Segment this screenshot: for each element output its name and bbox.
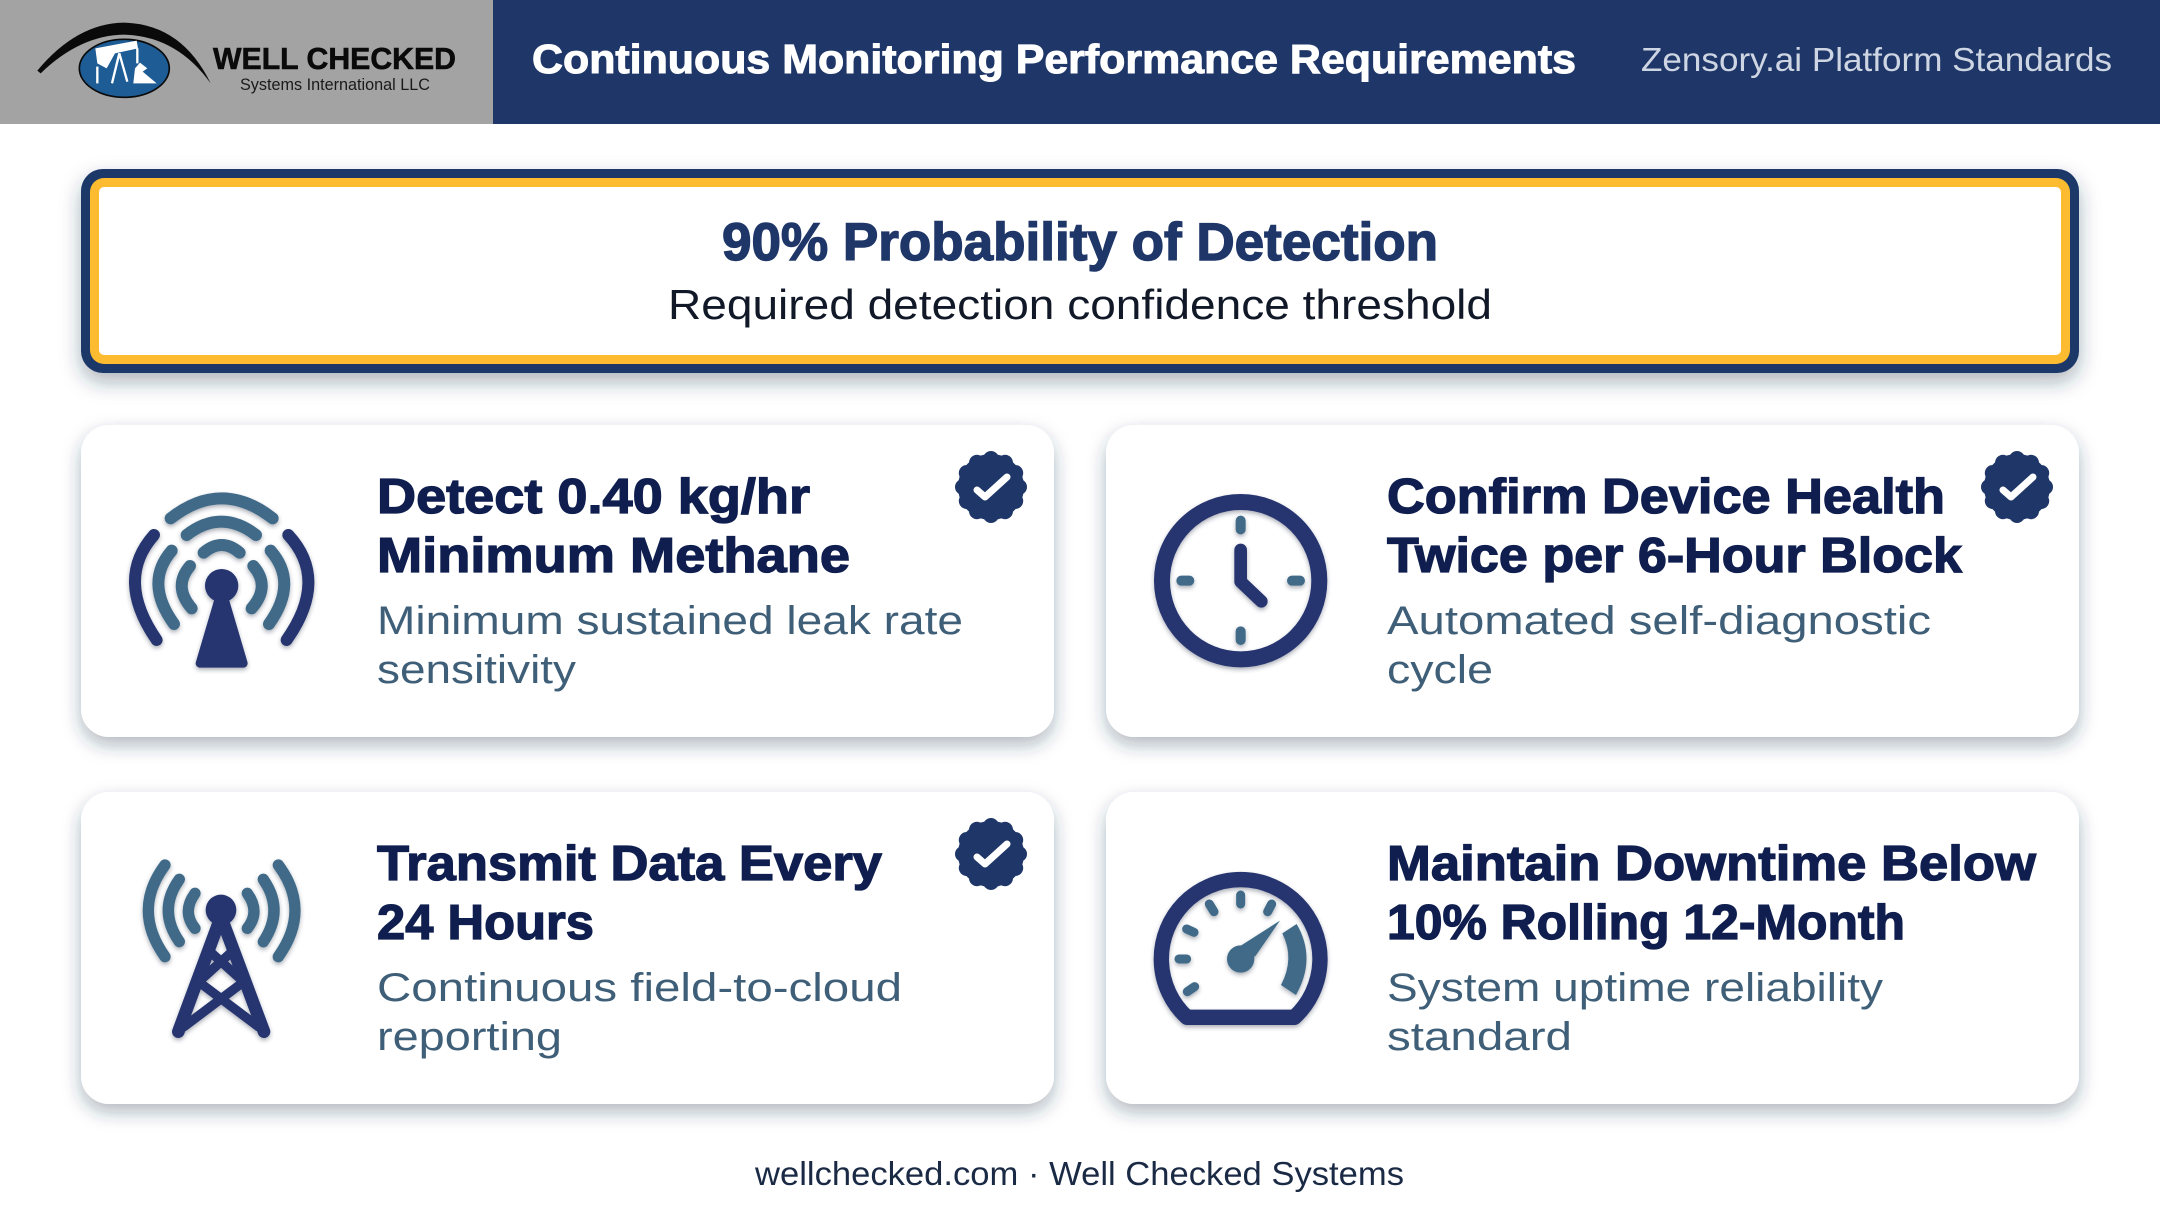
card description: Minimum sustained leak rate [377,599,963,643]
badge: check [1984,454,2050,520]
panel: methane detection: sensitivity [377,648,576,692]
badge: check [958,454,1024,520]
logo wordmark: WELL CHECKED [213,41,456,76]
card title: Detect 0.40 kg/hr [377,470,810,524]
card description: System uptime reliability [1387,966,1883,1010]
panel: device health [1106,425,2079,737]
header subtitle: Zensory.ai Platform Standards [1641,41,2112,78]
footer: wellchecked.com · Well Checked Systems [754,1155,1404,1192]
panel: downtime [1106,792,2079,1104]
panel: downtime: 10% Rolling 12-Month [1387,896,1905,950]
header title: Continuous Monitoring Performance Requirements [532,36,1576,82]
banner: detection threshold [81,169,2079,373]
panel: data transmission: 24 Hours [377,896,594,950]
banner subtext: Required detection confidence threshold [668,281,1492,328]
panel: device health: Twice per 6-Hour Block [1387,529,1963,583]
badge: check [958,821,1024,887]
icon: speedometer [1161,880,1320,1017]
panel: data transmission [81,792,1054,1104]
card description: Automated self-diagnostic [1387,599,1931,643]
panel: methane detection: Minimum Methane [377,529,850,583]
card title: Transmit Data Every [377,837,882,891]
panel: downtime: standard [1387,1015,1572,1059]
header bar [0,0,2160,124]
icon: signal beacon [135,498,308,663]
banner heading: 90% Probability of Detection [722,213,1438,272]
icon: clock [1162,502,1319,659]
card description: Continuous field-to-cloud [377,966,902,1010]
icon: radio tower [148,865,295,1032]
panel: data transmission: reporting [377,1015,562,1059]
header logo panel [0,0,493,124]
panel: device health: cycle [1387,648,1493,692]
logo eye mark [37,23,211,97]
panel: methane detection [81,425,1054,737]
card title: Maintain Downtime Below [1387,837,2037,891]
card title: Confirm Device Health [1387,470,1945,524]
logo tagline: Systems International LLC [240,75,430,94]
